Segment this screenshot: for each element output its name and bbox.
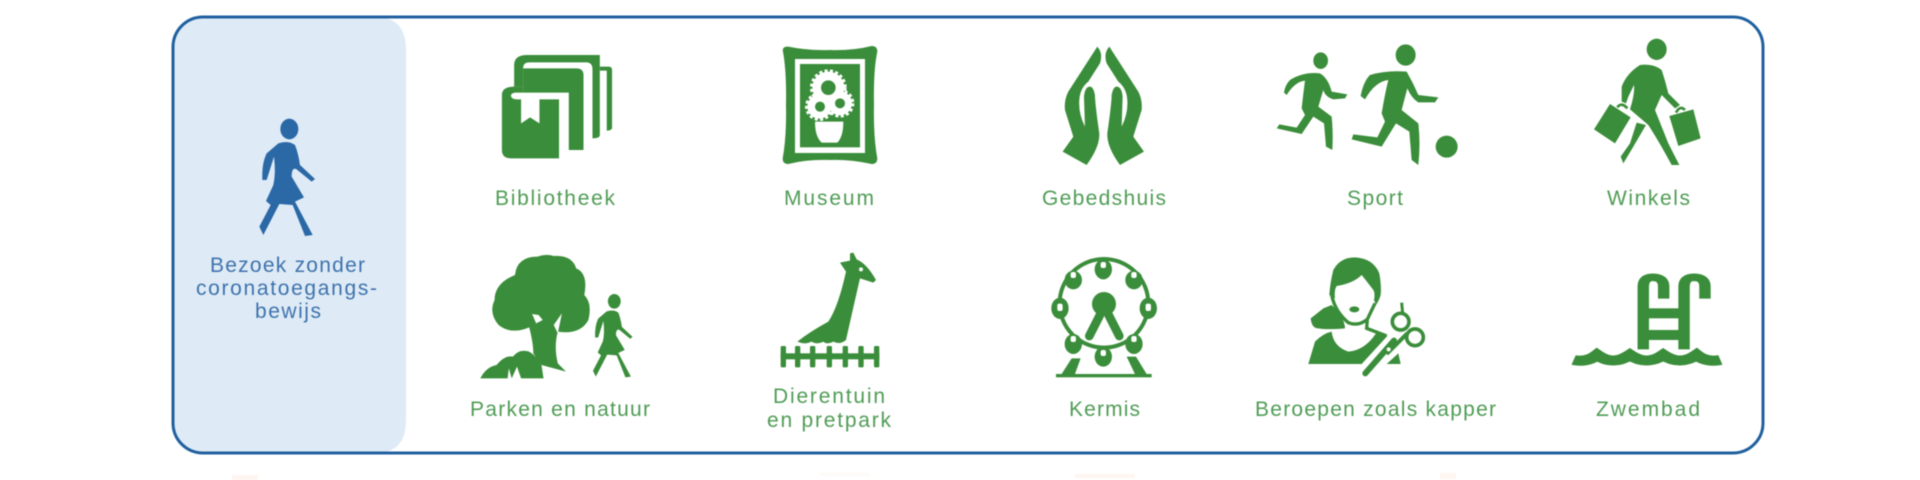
text: Bezoek zonder coronatoegangsbewijs [196, 254, 377, 323]
panel: left blue column [172, 17, 406, 453]
label: Dierentuin en pretpark: en pretpark [767, 409, 892, 432]
label: Winkels: Winkels [1607, 187, 1690, 210]
icon: praying hands [1063, 47, 1144, 165]
label: Bibliotheek: Bibliotheek [495, 187, 616, 210]
label: Beroepen zoals kapper: Beroepen zoals kapper [1255, 398, 1496, 421]
label: Dierentuin en pretpark [767, 385, 892, 432]
icon: framed sunflowers [783, 46, 877, 164]
label: Kermis: Kermis [1069, 398, 1140, 421]
label: Parken en natuur: Parken en natuur [470, 398, 650, 421]
icon: shopper with bags [1594, 39, 1701, 165]
icon: football players [1277, 44, 1458, 165]
faint marks at bottom edge [232, 473, 1456, 480]
icon: ferris wheel [1051, 259, 1157, 377]
text: Bezoek zonder coronatoegangsbewijs: coronatoegangs- [196, 277, 377, 300]
icon: tree and walker [480, 255, 633, 378]
text: Bezoek zonder coronatoegangsbewijs: Bezoek zonder [210, 254, 365, 277]
text: Bezoek zonder coronatoegangsbewijs: bewijs [255, 300, 321, 323]
label: Dierentuin en pretpark: Dierentuin [773, 385, 885, 408]
label: Gebedshuis: Gebedshuis [1042, 187, 1166, 210]
label: Sport: Sport [1347, 187, 1403, 210]
label: Zwembad: Zwembad [1596, 398, 1700, 421]
icon: hairdresser with scissors [1308, 257, 1423, 373]
icon: swimming pool ladder [1574, 277, 1720, 361]
icon: walking woman [259, 119, 315, 236]
panel: outer rounded border [173, 17, 1763, 453]
label: Museum: Museum [784, 187, 874, 210]
icon: books [502, 55, 612, 158]
icon: giraffe behind fence [781, 253, 879, 367]
